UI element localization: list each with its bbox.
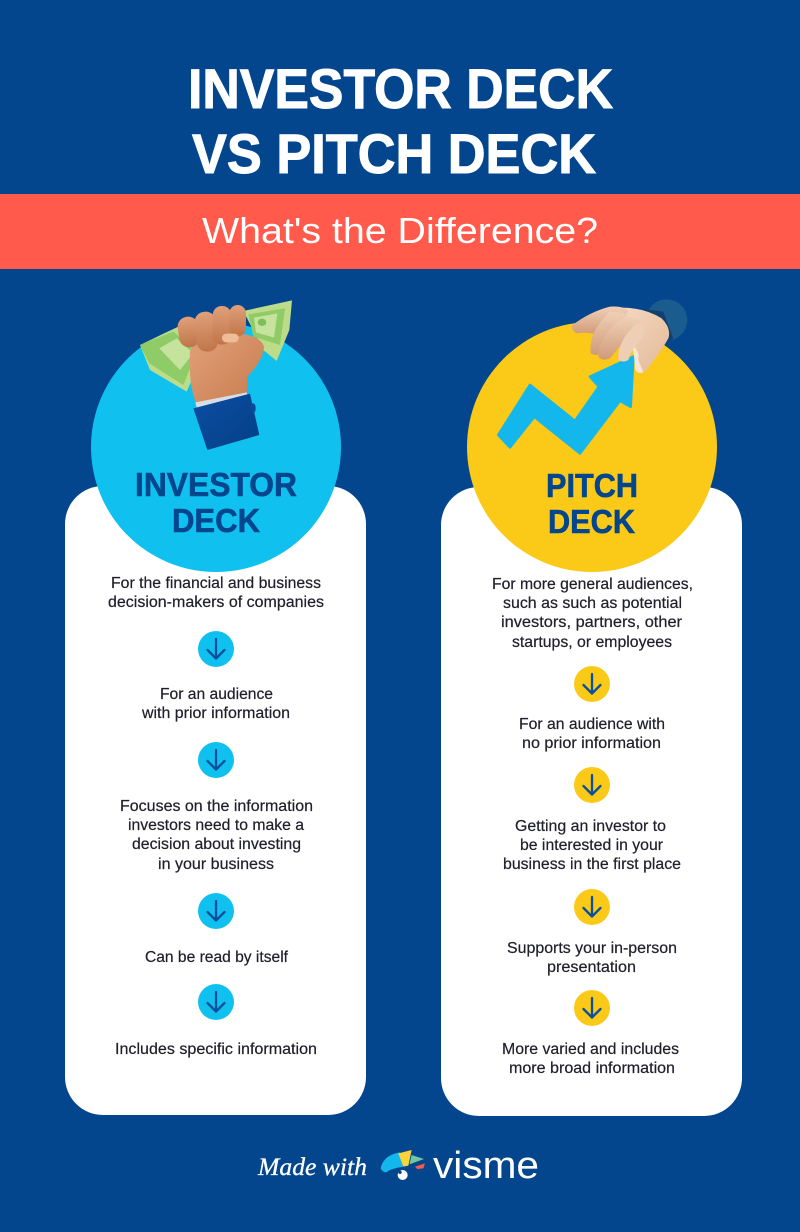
title: VS PITCH DECK (192, 122, 596, 185)
text: audience: For the financial and business (111, 575, 321, 592)
text: audience: decision-makers of companies (108, 594, 324, 611)
text: focus (120, 798, 313, 873)
panel: investor deck (65, 300, 366, 1115)
text: in-person presentation: presentation (547, 959, 636, 976)
text: investor interest: Getting an investor to (515, 818, 666, 835)
text: specific information: Includes specific information (115, 1041, 317, 1058)
text: in-person presentation (507, 940, 677, 976)
heading: investor deck (135, 466, 297, 539)
icon: arrow down (574, 666, 610, 702)
icon: growth arrow (498, 357, 633, 453)
icon: arrow down (574, 889, 610, 925)
icon: arrow down (574, 767, 610, 803)
footer: made with visme (257, 1145, 539, 1187)
icon: fist holding money (140, 300, 292, 450)
text: read by itself: Can be read by itself (145, 949, 289, 966)
icon: arrow down (198, 893, 234, 929)
text: no prior information: For an audience with (519, 716, 665, 733)
heading: investor deck: INVESTOR (135, 466, 297, 503)
text: focus: Focuses on the information (120, 798, 313, 815)
text: broad information (502, 1041, 679, 1077)
text: focus: decision about investing (132, 836, 301, 853)
text: focus: investors need to make a (128, 817, 304, 834)
subtitle banner: What's the Difference? (202, 210, 598, 251)
card: pitch deck (441, 487, 742, 1116)
circle: pitch deck header (467, 322, 717, 572)
icon: hand holding arrow (572, 299, 687, 373)
icon: visme logo (381, 1150, 425, 1180)
text: investor interest (503, 818, 681, 873)
text: audience: such as such as potential (503, 595, 682, 612)
heading: pitch deck (546, 467, 638, 540)
icon: arrow down (574, 990, 610, 1026)
text: no prior information (519, 716, 665, 752)
panel: pitch deck (441, 299, 742, 1116)
text: investor interest: be interested in your (520, 837, 663, 854)
text: audience: startups, or employees (512, 634, 672, 651)
icon: arrow down (198, 742, 234, 778)
text: prior information: For an audience (160, 686, 273, 703)
circle: investor deck header (91, 322, 341, 572)
title (188, 57, 613, 185)
text: audience: investors, partners, other (501, 614, 682, 631)
text: investor interest: business in the first place (503, 856, 681, 873)
text: in-person presentation: Supports your in-person (507, 940, 677, 957)
text: no prior information: no prior information (522, 735, 661, 752)
icon: arrow down (198, 631, 234, 667)
text: prior information (141, 686, 290, 722)
card: investor deck (65, 486, 366, 1115)
text: prior information: with prior information (141, 705, 290, 722)
heading: pitch deck: DECK (548, 503, 635, 540)
icon: arrow down (198, 984, 234, 1020)
text: audience (492, 576, 693, 651)
text: made with: Made with (257, 1154, 367, 1181)
heading: investor deck: DECK (172, 502, 260, 539)
subtitle banner (0, 194, 800, 269)
text: focus: in your business (158, 856, 274, 873)
text: broad information: more broad information (509, 1060, 675, 1077)
text: visme: visme (433, 1145, 539, 1187)
text: audience (108, 575, 324, 611)
title: INVESTOR DECK (188, 57, 613, 120)
heading: pitch deck: PITCH (546, 467, 638, 504)
text: broad information: More varied and includes (502, 1041, 679, 1058)
text: audience: For more general audiences, (492, 576, 693, 593)
